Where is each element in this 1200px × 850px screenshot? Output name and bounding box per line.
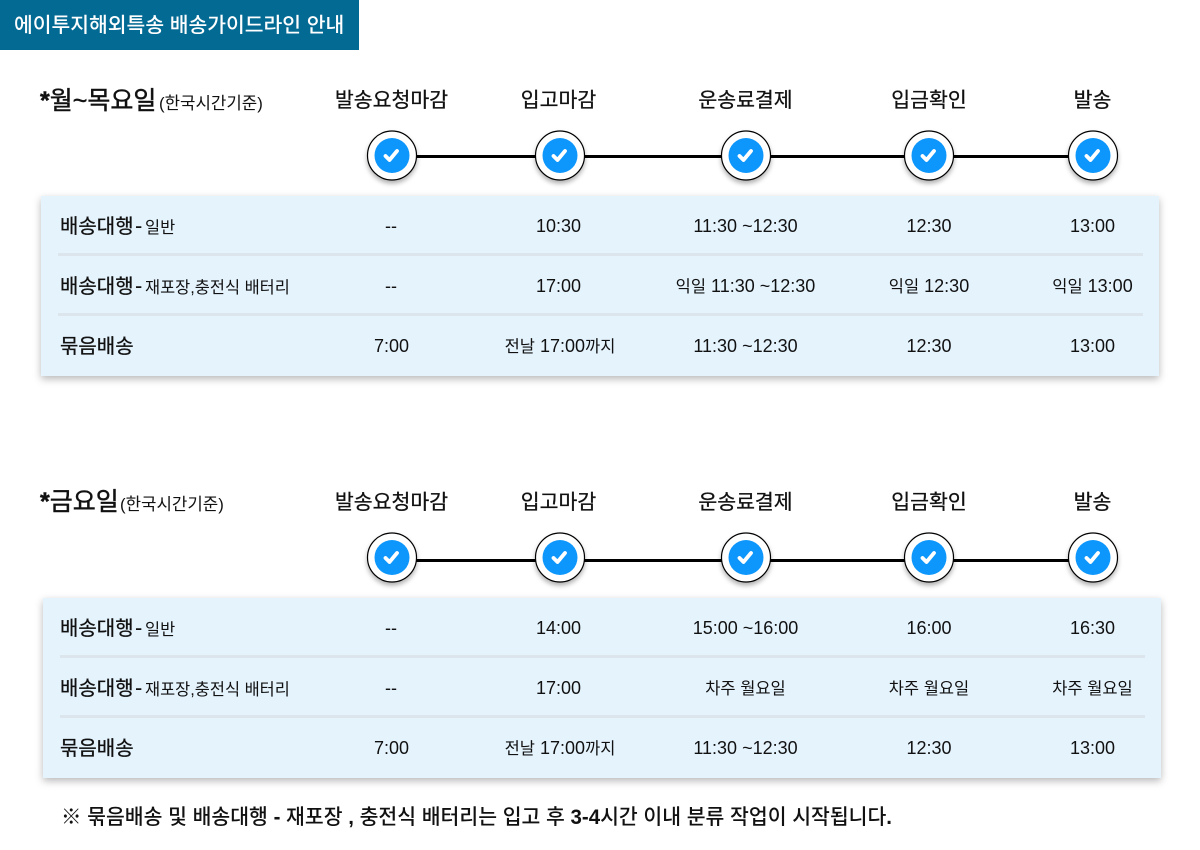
panel: weekday schedule table — [41, 196, 1159, 376]
row: consolidated shipping: 전날 17:00까지 — [505, 336, 615, 356]
row: repacking and battery delivery: 재포장,충전식 배터리 — [145, 279, 290, 297]
row: repacking and battery delivery: 익일 12:30 — [889, 276, 969, 296]
row: consolidated shipping: 13:00 — [1070, 738, 1115, 758]
row: consolidated shipping: 11:30 ~12:30 — [693, 738, 798, 758]
row: consolidated shipping: 묶음배송 — [60, 737, 134, 760]
row: repacking and battery delivery: -- — [385, 678, 397, 698]
row: general delivery: 일반 — [145, 219, 175, 237]
row: general delivery: 12:30 — [906, 216, 952, 236]
row: consolidated shipping — [60, 737, 1115, 760]
row: general delivery: - — [135, 213, 142, 238]
row: general delivery: 16:30 — [1070, 618, 1115, 638]
row: general delivery: -- — [385, 618, 397, 638]
row: repacking and battery delivery: 배송대행 — [60, 276, 134, 298]
row: general delivery: 배송대행 — [60, 618, 134, 640]
row: general delivery: 16:00 — [906, 618, 952, 638]
heading: Friday: (한국시간기준) — [120, 495, 224, 514]
row: general delivery — [60, 615, 1115, 640]
row: general delivery: 배송대행 — [60, 216, 134, 238]
panel: Friday schedule table — [43, 598, 1161, 778]
row: repacking and battery delivery: 17:00 — [536, 276, 581, 296]
timeline step labels: 입금확인 — [891, 491, 967, 514]
row: repacking and battery delivery: -- — [385, 276, 397, 296]
row: consolidated shipping: 12:30 — [906, 336, 952, 356]
timeline step labels: 운송료결제 — [698, 89, 793, 112]
heading: Monday to Thursday — [40, 87, 263, 115]
row: repacking and battery delivery: 익일 11:30 ~12:30 — [676, 276, 815, 296]
timeline step labels: 발송요청마감 — [335, 89, 448, 112]
row: repacking and battery delivery: 17:00 — [536, 678, 581, 698]
timeline step labels: 입금확인 — [891, 89, 967, 112]
section: Monday to Thursday schedule — [40, 87, 1159, 376]
heading: Monday to Thursday: *월~목요일 — [40, 87, 156, 115]
row: consolidated shipping: 13:00 — [1070, 336, 1115, 356]
row: repacking and battery delivery — [60, 273, 1133, 298]
row: consolidated shipping: 12:30 — [906, 738, 952, 758]
row: general delivery: 11:30 ~12:30 — [693, 216, 798, 236]
timeline step labels: 운송료결제 — [698, 491, 793, 514]
row: general delivery — [60, 213, 1115, 238]
row: general delivery: 14:00 — [536, 618, 581, 638]
title banner — [0, 0, 359, 50]
row: general delivery: 13:00 — [1070, 216, 1115, 236]
row: repacking and battery delivery: 배송대행 — [60, 678, 134, 700]
title banner: 에이투지해외특송 배송가이드라인 안내 — [14, 14, 344, 37]
heading: Monday to Thursday: (한국시간기준) — [159, 94, 263, 113]
row: consolidated shipping: 7:00 — [374, 336, 409, 356]
row: repacking and battery delivery: 차주 월요일 — [705, 679, 786, 698]
timeline step labels — [335, 491, 1111, 514]
row: general delivery: 10:30 — [536, 216, 581, 236]
row: repacking and battery delivery — [60, 675, 1133, 700]
row: repacking and battery delivery: 차주 월요일 — [1052, 679, 1133, 698]
heading: Friday — [40, 488, 224, 516]
row: repacking and battery delivery: 차주 월요일 — [889, 679, 969, 698]
timeline step labels: 발송 — [1074, 491, 1111, 514]
timeline with check icons — [368, 131, 1118, 180]
row: repacking and battery delivery: - — [135, 273, 142, 298]
row: repacking and battery delivery: 재포장,충전식 배터리 — [145, 681, 290, 699]
timeline with check icons — [368, 533, 1118, 582]
row: consolidated shipping: 7:00 — [374, 738, 409, 758]
row: general delivery: 일반 — [145, 621, 175, 639]
row: consolidated shipping: 11:30 ~12:30 — [693, 336, 798, 356]
row: consolidated shipping — [60, 335, 1115, 358]
timeline step labels: 발송요청마감 — [335, 491, 448, 514]
timeline step labels: 발송 — [1074, 89, 1111, 112]
heading: Friday: *금요일 — [40, 488, 119, 516]
row: general delivery: 15:00 ~16:00 — [693, 618, 798, 638]
row: repacking and battery delivery: - — [135, 675, 142, 700]
row: consolidated shipping: 묶음배송 — [60, 335, 134, 358]
section: Friday schedule — [40, 488, 1161, 778]
row: general delivery: - — [135, 615, 142, 640]
row: repacking and battery delivery: 익일 13:00 — [1052, 276, 1133, 296]
timeline step labels: 입고마감 — [521, 491, 596, 514]
timeline step labels: 입고마감 — [521, 89, 596, 112]
row: general delivery: -- — [385, 216, 397, 236]
row: consolidated shipping: 전날 17:00까지 — [505, 738, 615, 758]
timeline step labels — [335, 89, 1111, 112]
footnote: ※ 묶음배송 및 배송대행 - 재포장 , 충전식 배터리는 입고 후 3-4시간 이내 분류 작업이 시작됩니다. — [61, 806, 892, 829]
